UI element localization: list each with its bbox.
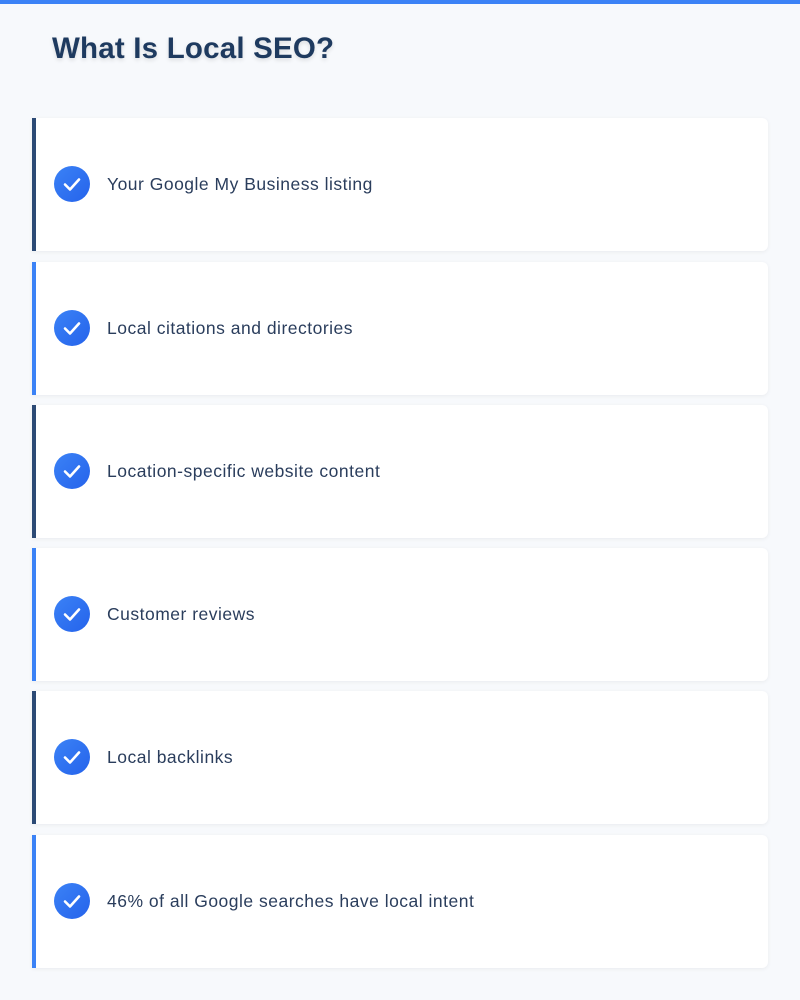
icon: check bbox=[54, 310, 90, 346]
card: Google My Business bbox=[32, 118, 768, 251]
text: 46% of all Google searches have local intent bbox=[107, 891, 474, 911]
icon: check bbox=[54, 596, 90, 632]
card: statistic bbox=[32, 835, 768, 968]
card: reviews bbox=[32, 548, 768, 681]
title: What Is Local SEO? bbox=[52, 32, 334, 65]
icon: check bbox=[54, 883, 90, 919]
text: Your Google My Business listing bbox=[107, 174, 373, 194]
text: Location-specific website content bbox=[107, 461, 380, 481]
icon: check bbox=[54, 166, 90, 202]
icon: check bbox=[54, 453, 90, 489]
card: content bbox=[32, 405, 768, 538]
icon: check bbox=[54, 739, 90, 775]
card: backlinks bbox=[32, 691, 768, 824]
text: Local citations and directories bbox=[107, 318, 353, 338]
card: citations bbox=[32, 262, 768, 395]
text: Local backlinks bbox=[107, 747, 233, 767]
text: Customer reviews bbox=[107, 604, 255, 624]
